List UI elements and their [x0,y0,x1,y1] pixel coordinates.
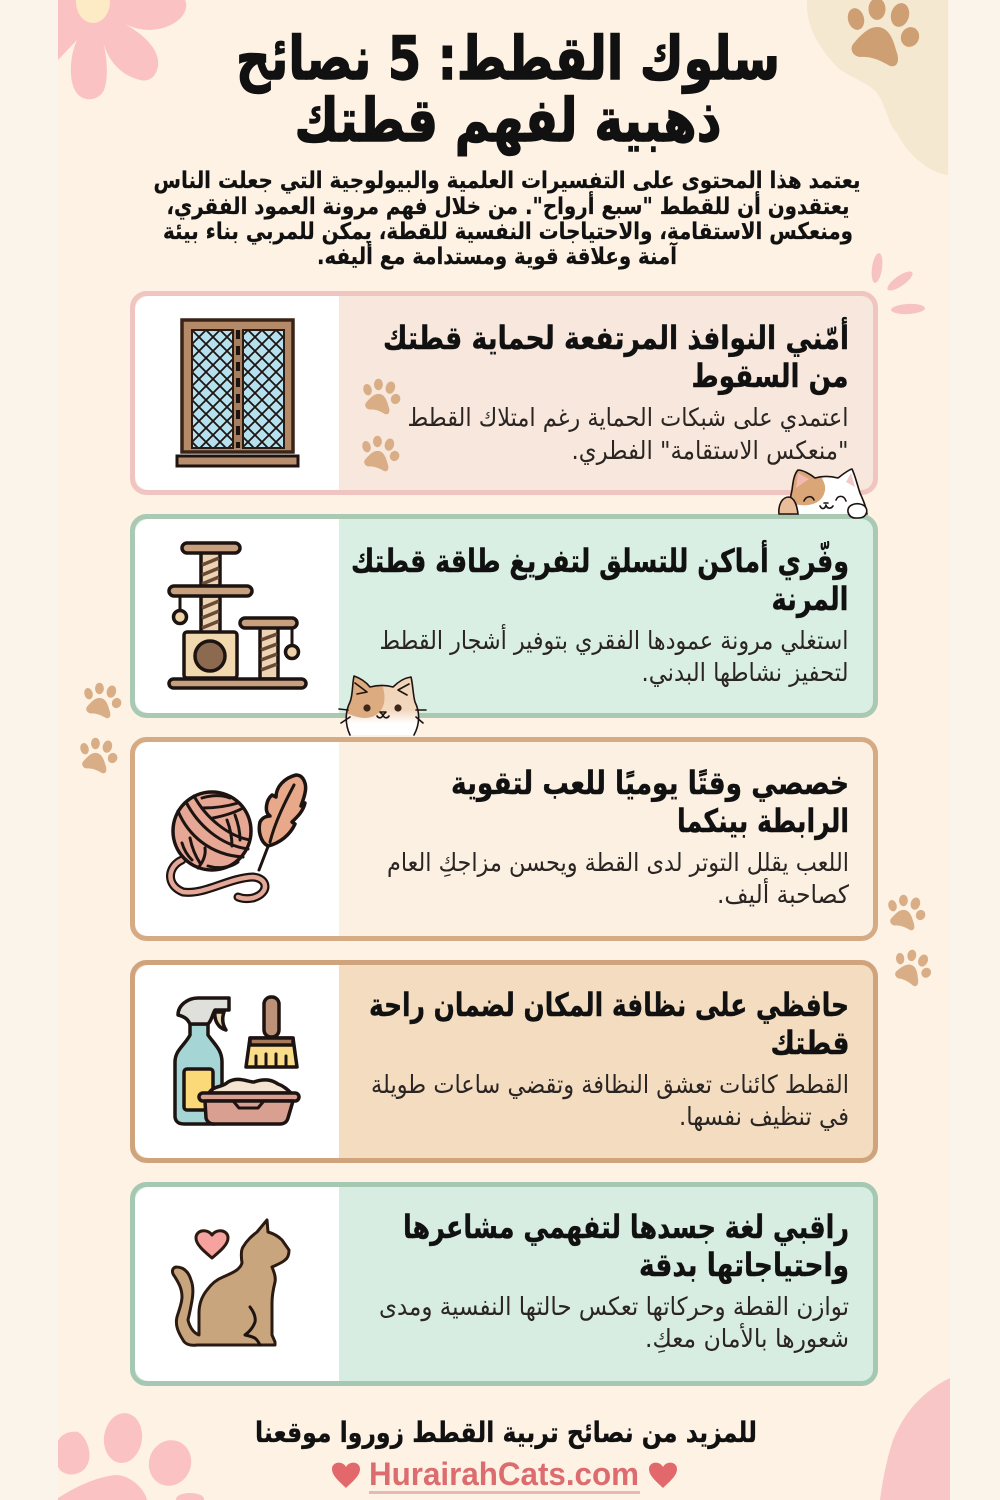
body text: كصاحبة أليف. [717,877,849,909]
icon: yarn ball and feather [170,775,306,899]
body text [371,1070,849,1132]
body text: القطط كائنات تعشق النظافة وتقضي ساعات طويلة [371,1070,849,1100]
title [236,24,780,156]
icon: cat tree [169,543,306,688]
icon: heart right [649,1463,677,1488]
heading: أمّني النوافذ المرتفعة لحماية قطتك [383,317,849,357]
decoration: pink blob bottom right [880,1378,950,1500]
icon: spray bottle, brush and litter box [175,997,299,1124]
decoration: pink sparks [870,252,925,315]
illustration: cat peeking over card 2 [779,465,867,518]
heading: حافظي على نظافة المكان لضمان راحة [369,986,849,1024]
decoration: pink paw bottom left [58,1411,204,1500]
body text: توازن القطة وحركاتها تعكس حالتها النفسية ومدى [379,1292,849,1322]
heading: راقبي لغة جسدها لتفهمي مشاعرها [403,1208,849,1246]
body text: في تنظيف نفسها. [679,1102,849,1132]
decoration: beige blob with paw [807,0,948,175]
body text: شعورها بالأمان معكِ. [645,1322,849,1353]
body text [380,623,848,688]
heading [451,764,849,840]
panel: card 2 climbing [132,516,876,716]
intro text: يعتقدون أن للقطط "سبع أرواح". من خلال فهم مرونة العمود الفقري، [166,190,850,220]
panel: card 5 body language [132,1184,876,1384]
body text: لتحفيز نشاطها البدني. [642,658,848,688]
icon: cat silhouette with heart [172,1220,289,1345]
heading: واحتياجاتها بدقة [639,1246,849,1284]
decoration: pink flower [58,0,186,99]
body text: اللعب يقلل التوتر لدى القطة ويحسن مزاجكِ العام [387,848,849,878]
decoration: small paws [79,379,936,989]
icon: heart left [332,1463,360,1488]
heading: قطتك [770,1024,850,1062]
body text: "منعكس الاستقامة" الفطري. [572,436,848,465]
intro text: آمنة وعلاقة قوية ومستدامة مع أليفه. [317,240,678,270]
heading: خصصي وقتًا يوميًا للعب لتقوية [451,764,849,802]
heading [403,1208,849,1284]
heading: الرابطة بينكما [677,802,849,840]
body text: استغلي مرونة عمودها الفقري بتوفير أشجار القطط [380,623,848,656]
body text [408,403,848,465]
panel: card 4 cleanliness [132,962,876,1160]
intro text [154,168,860,270]
body text: اعتمدي على شبكات الحماية رغم امتلاك القطط [408,403,848,433]
title: ذهبية لفهم قطتك [294,86,722,156]
heading: المرنة [772,580,848,618]
illustration: cat peeking at card 2 bottom [339,670,430,735]
panel: card 1 window safety [132,294,876,492]
icon: window with safety net [177,320,298,466]
heading: من السقوط [692,357,848,395]
body text [387,848,849,909]
heading: وفّري أماكن للتسلق لتفريغ طاقة قطتك [351,540,849,580]
heading [351,540,849,618]
heading [383,317,849,395]
title: سلوك القطط: 5 نصائح [236,24,780,94]
body text [379,1292,849,1353]
heading [369,986,850,1062]
panel: card 3 play [132,740,876,938]
footer call to action: للمزيد من نصائح تربية القطط زوروا موقعنا [255,1416,757,1449]
footer website link: HurairahCats.com [369,1456,639,1492]
intro text: يعتمد هذا المحتوى على التفسيرات العلمية والبيولوجية التي جعلت الناس [154,168,860,194]
intro text: ومنعكس الاستقامة، والاحتياجات النفسية للقطة، يمكن للمربي بناء بيئة [163,219,853,245]
